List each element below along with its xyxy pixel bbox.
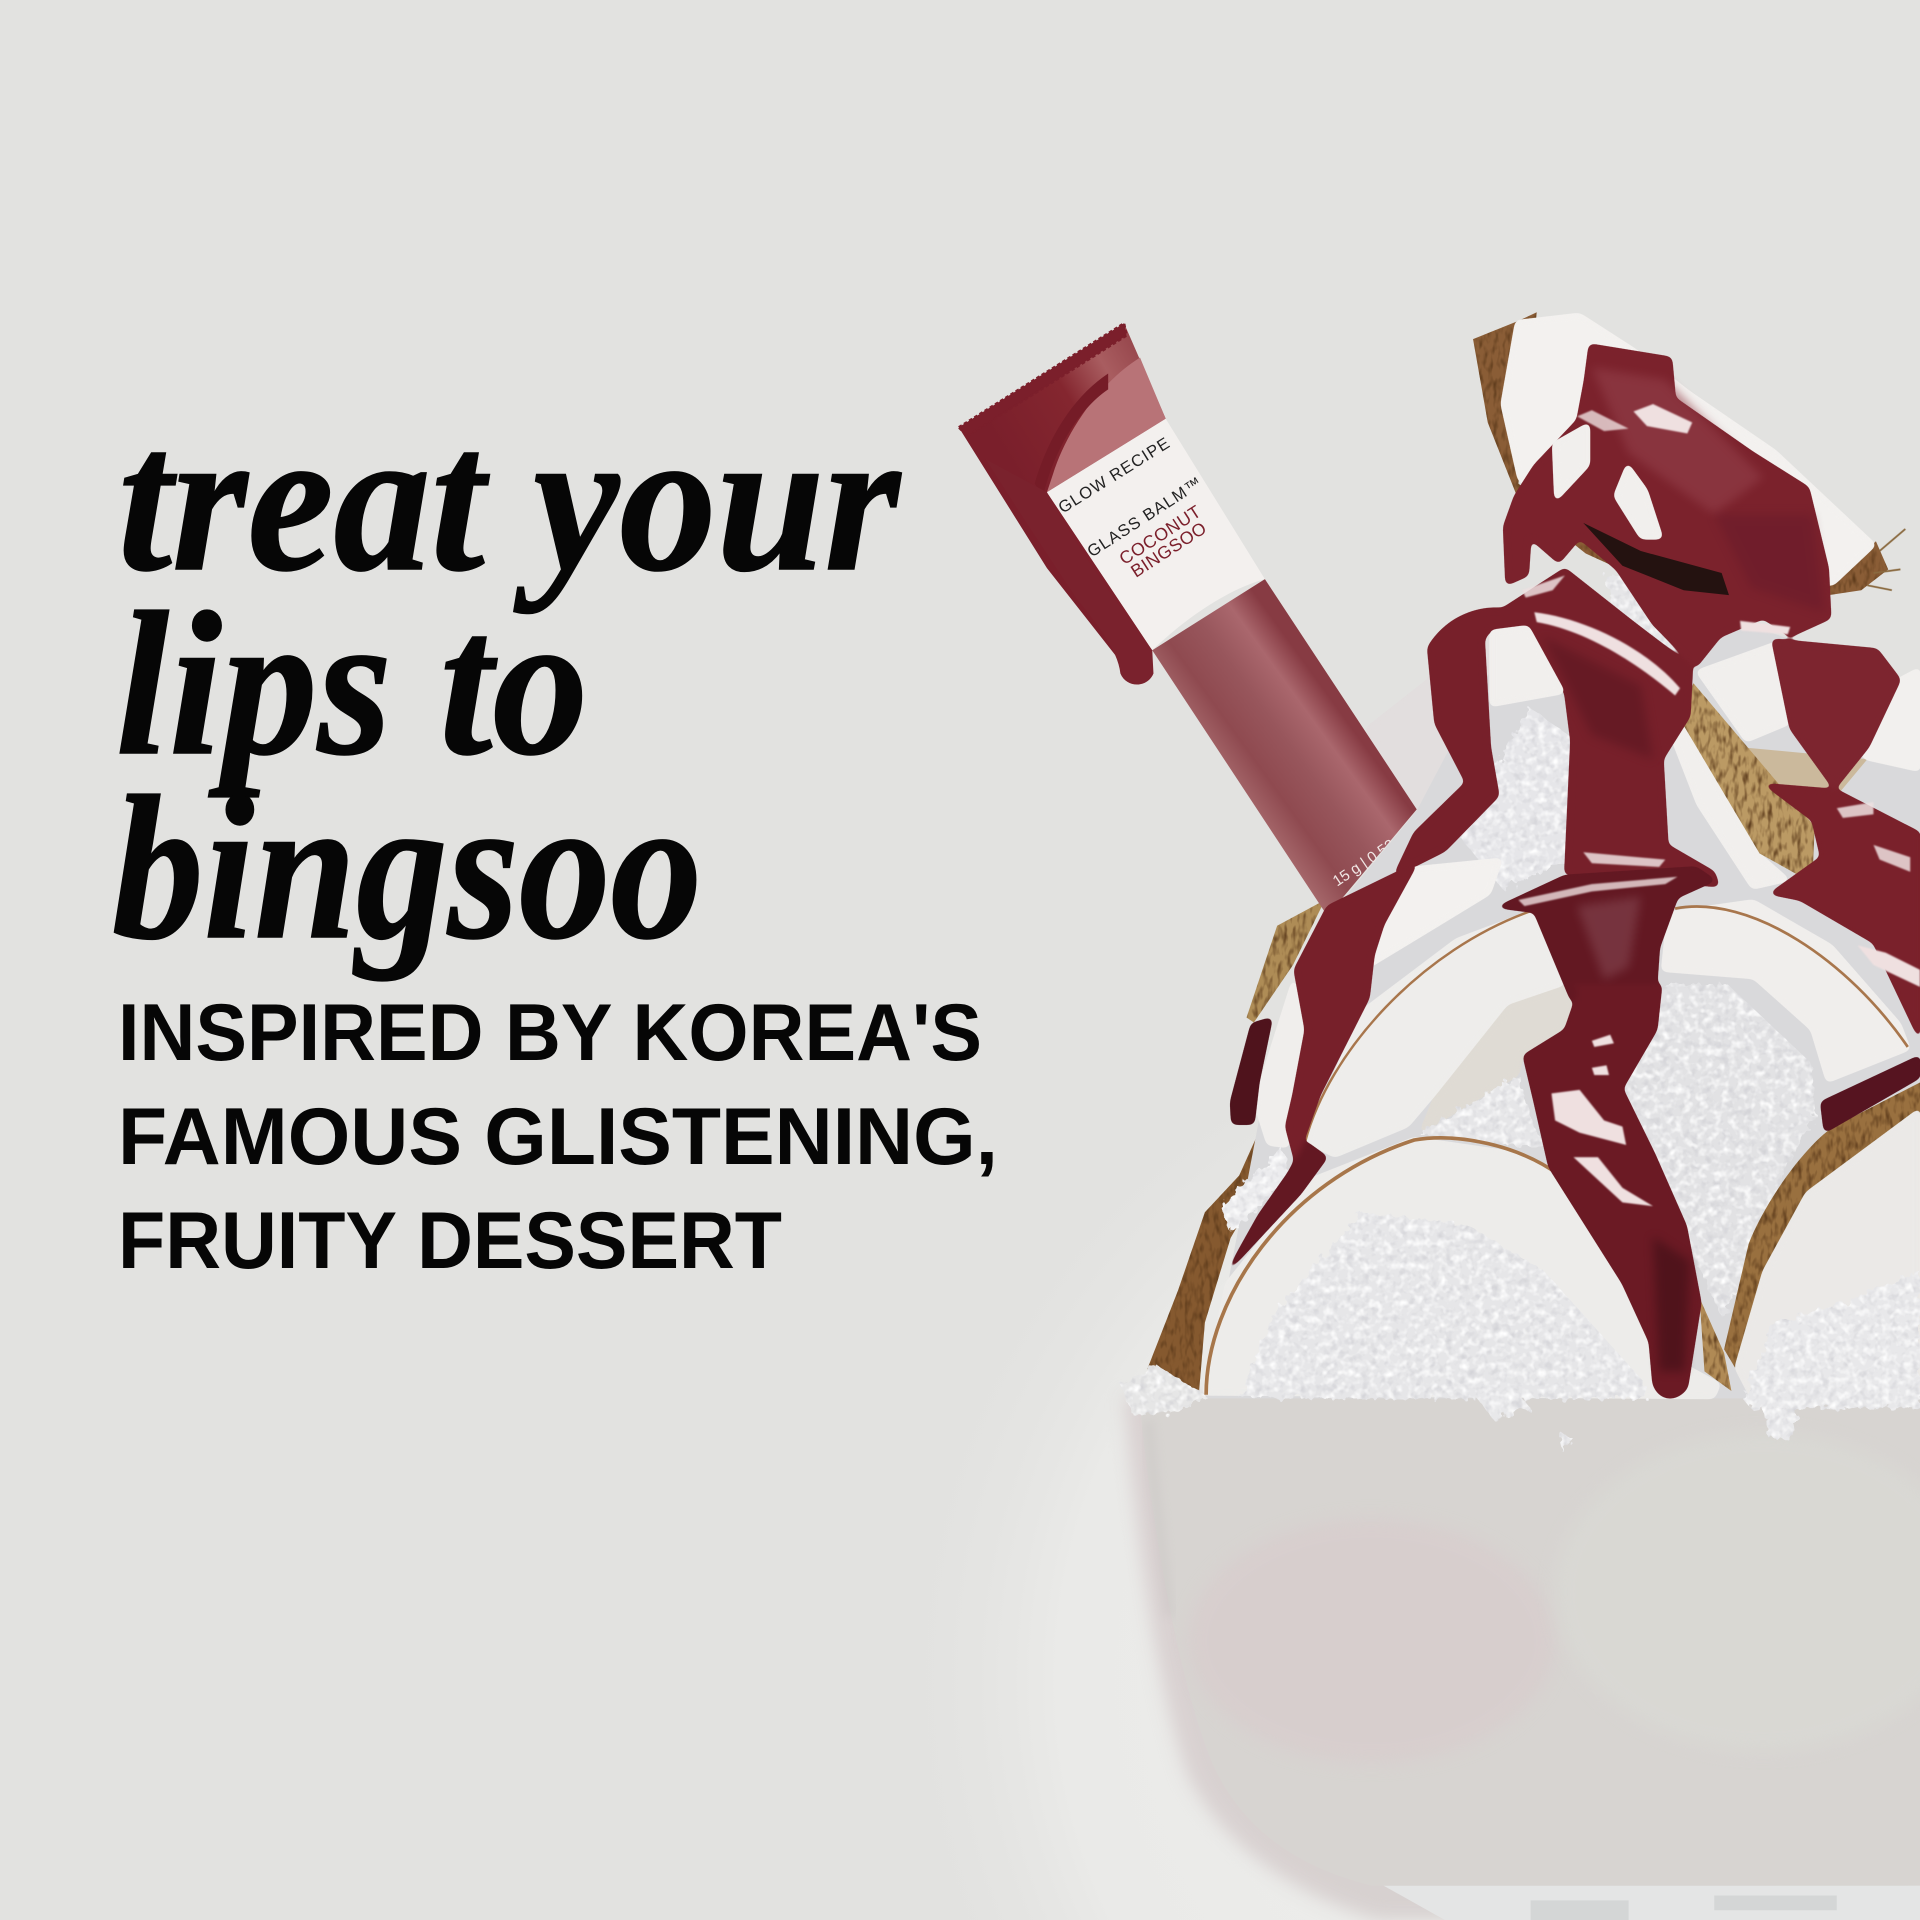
right sauce over chunk — [1772, 639, 1900, 790]
centre top sauce — [1496, 867, 1716, 1000]
back coconut behind tube — [1365, 631, 1500, 833]
glossy highlights on sauce — [1518, 404, 1920, 1206]
main sauce drips — [1224, 367, 1920, 1398]
brown fibres on upper wedge — [1867, 529, 1905, 590]
sauce between crescents at right — [1821, 1056, 1920, 1133]
white flesh showing through top sauce — [1490, 422, 1663, 707]
illustration: coconut bingsoo dessert with product tube — [959, 312, 1920, 1920]
subheading: inspired by Korea's famous glistening, fruity dessert: INSPIRED BY KOREA'S — [118, 988, 982, 1078]
subheading: inspired by Korea's famous glistening, fruity dessert — [118, 988, 998, 1286]
shaved ice upper — [1458, 576, 1704, 889]
sauce on top wedge — [1504, 344, 1831, 667]
centre drip — [1523, 984, 1701, 1398]
product tube: Glow Recipe Glass Balm Coconut Bingsoo — [959, 323, 1417, 916]
label text: GLOW RECIPE — [1055, 434, 1173, 517]
right side coconut chunks and husk strip — [1668, 639, 1920, 889]
upper coconut wedge — [1473, 312, 1888, 612]
tube body — [1152, 579, 1417, 916]
large coconut crescents, middle row — [1254, 900, 1910, 1157]
heading: treat your lips to bingsoo: lips to — [116, 569, 588, 798]
heading: treat your lips to bingsoo: bingsoo — [112, 753, 702, 982]
subheading: inspired by Korea's famous glistening, fruity dessert: FRUITY DESSERT — [118, 1196, 782, 1286]
balm drip — [986, 459, 1153, 684]
shaved ice mounds over rim — [1120, 1212, 1920, 1451]
coconut husk behind: left side — [1147, 900, 1325, 1395]
bottom coconut crescents — [1202, 1082, 1920, 1398]
thin sauce along lower crescent — [1224, 1141, 1327, 1276]
husk — [1473, 312, 1888, 612]
shaved ice, centre — [1220, 984, 1816, 1316]
label text: 15 g | 0.53 — [1330, 836, 1398, 890]
glass bowl of shaved ice — [1124, 1396, 1920, 1920]
heading: treat your lips to bingsoo: treat your — [118, 385, 902, 614]
dark gap under top wedge — [1583, 523, 1729, 595]
tube upper shoulder and crimp — [959, 323, 1166, 671]
flesh — [1501, 313, 1876, 585]
left dark drip — [1231, 1018, 1272, 1124]
coconut chunk below tube — [1327, 858, 1502, 980]
upper sauce pours — [1393, 344, 1920, 1041]
ice-toned base filling the coconut mound — [1206, 612, 1920, 1398]
serrated crimp edge — [959, 323, 1127, 436]
tonal shading on sauce — [1577, 896, 1641, 980]
dome sauce — [1393, 568, 1719, 887]
label text: BINGSOO — [1127, 518, 1210, 581]
left sauce stream — [1286, 862, 1418, 1163]
heading: treat your lips to bingsoo — [112, 385, 902, 982]
right lower sauce — [1763, 784, 1920, 1041]
label text — [1055, 434, 1398, 890]
label text: COCONUT — [1116, 501, 1205, 569]
label — [1047, 419, 1265, 650]
subheading: inspired by Korea's famous glistening, fruity dessert: FAMOUS GLISTENING, — [118, 1092, 998, 1182]
label text: GLASS BALM™ — [1084, 473, 1205, 561]
